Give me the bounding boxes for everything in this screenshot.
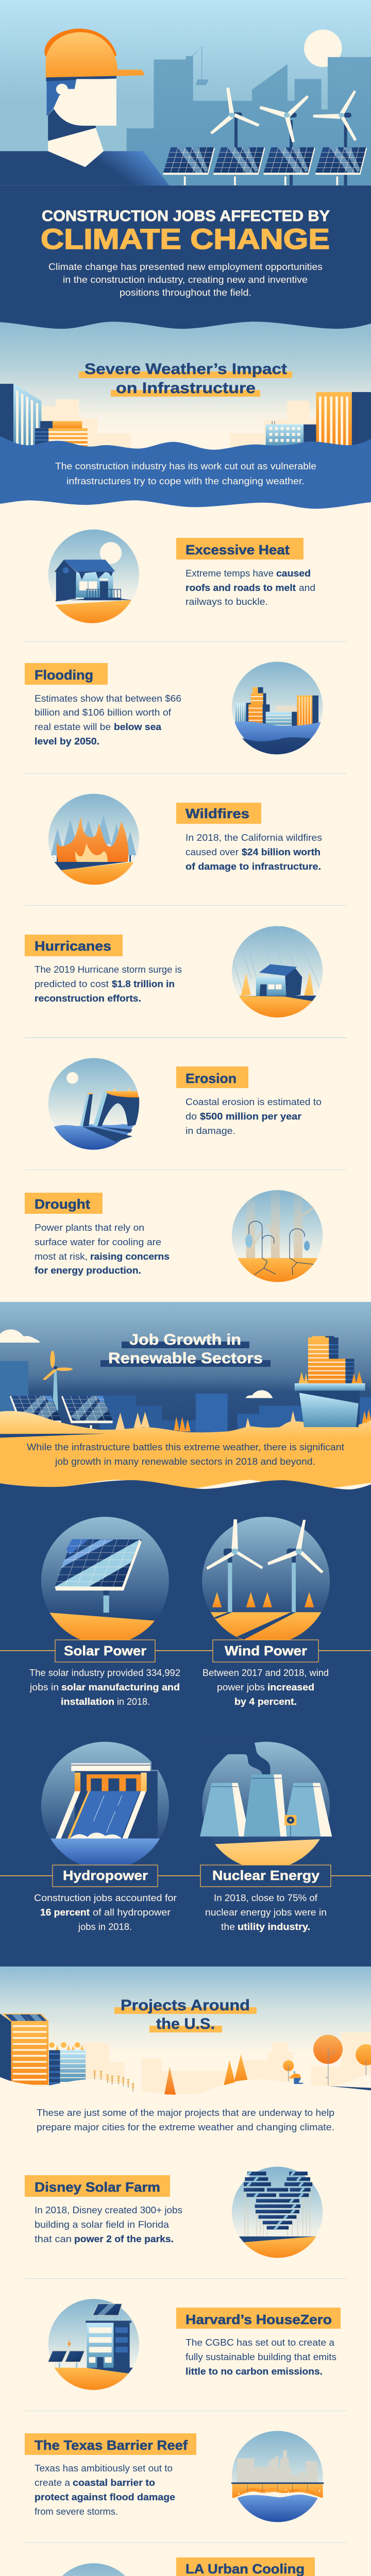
text: disney [35,2205,182,2244]
tag: drought [25,1193,103,1214]
text: erosion: in damage. [185,1126,235,1136]
wind turbines [211,88,357,185]
panel: severe weather banner [0,319,371,509]
intro text: positions throughout the field. [120,287,251,298]
text: nuclear energy: utility industry. [238,1922,310,1932]
text: flooding [35,693,181,747]
text: disney: power 2 of the parks. [74,2234,174,2244]
text: erosion: $500 million per year [200,1111,301,1122]
text: nuclear energy: In 2018, close to 75% of [214,1893,318,1903]
text: harvard [185,2337,336,2377]
text: wildfires [185,833,322,872]
text: texas: from severe storms. [35,2506,118,2517]
text: wind power [203,1668,329,1707]
text: flooding: real estate will be [35,722,111,732]
text: hydropower: jobs in 2018. [78,1922,132,1932]
text: nuclear energy [205,1893,327,1932]
tag: texas barrier reef: The Texas Barrier Reef [35,2437,188,2453]
icon: wind turbines [202,1517,330,1645]
icon: hurricane house [232,926,323,1018]
tag: hydropower [53,1865,158,1887]
text: drought: for energy production. [35,1265,141,1276]
heading: projects: Projects Around [121,1997,250,2014]
icon: LA urban cooling planters [48,2563,139,2576]
icon: planting worker [288,2071,304,2084]
connector line [0,1875,53,1876]
connector line [155,1650,371,1651]
text: projects intro: These are just some of the major projects that are underway to help [37,2108,334,2118]
panel: job growth banner [0,1302,371,1489]
panel: hero illustration [0,0,371,185]
foreground hill [0,2073,371,2106]
text: solar power: installation [61,1697,114,1707]
tag: excessive heat [176,538,303,560]
yellow ground [0,1411,371,1489]
panel: projects banner [0,1967,371,2106]
text: job growth intro: job growth in many renewable sectors in 2018 and beyond. [55,1456,315,1467]
ground trees [115,1409,371,1431]
text: solar power: The solar industry provided 334,992 [29,1668,180,1678]
pale skyline [84,2032,371,2095]
navy section background [0,1480,371,1967]
icon: flooded city [232,662,323,754]
text: texas: coastal barrier to [73,2478,155,2488]
tag: hydropower: Hydropower [63,1868,148,1883]
icon: hydro dam [41,1742,169,1870]
text: infrastructure intro: The construction industry has its work cut out as vulnerable [55,461,316,471]
text: texas: Texas has ambitiously set out to [35,2463,173,2473]
icon: yellow wind turbine [43,1351,73,1411]
tag: wind power [213,1640,318,1662]
text: wildfires: $24 billion worth [242,847,321,857]
text: drought: Power plants that rely on [35,1223,144,1233]
icon: disney solar field [232,2167,323,2258]
text: job growth intro: While the infrastructure battles this extreme weather, there is significant [27,1442,344,1452]
tag: hurricanes: Hurricanes [35,938,111,954]
icon: excessive heat house [48,530,139,623]
text: excessive heat [185,568,315,607]
text: hurricanes: $1.8 trillion in [112,979,175,989]
intro text: in the construction industry, creating new and inventive [63,275,308,285]
title [41,208,330,255]
text: projects intro [37,2108,334,2132]
text: erosion [185,1097,322,1136]
text: hurricanes: The 2019 Hurricane storm surge is [35,964,182,975]
tag: erosion [176,1066,248,1088]
text: texas: create a [35,2478,71,2488]
tag: harvard's housezero: Harvard’s HouseZero [185,2312,332,2327]
text: wind power: by 4 percent. [234,1697,297,1707]
text: disney: that can [35,2234,72,2244]
text: hydropower: of all hydropower [93,1907,171,1918]
text: infrastructure intro: infrastructures try to cope with the changing weather. [66,476,305,486]
text: hurricanes: predicted to cost [35,979,109,989]
text: drought: raising concerns [90,1251,170,1262]
tag: wildfires [176,803,261,824]
tower on hull [295,1336,365,1427]
text: nuclear energy: the [221,1922,235,1932]
icon: coastal erosion [48,1058,139,1150]
intro text: Climate change has presented new employment opportunities [48,262,323,272]
tag: texas barrier reef [25,2433,196,2455]
heading: job growth: Job Growth in [129,1331,241,1348]
text: erosion: do [185,1111,197,1122]
connector line [0,1650,55,1651]
solar panels [10,1396,113,1434]
heading: job growth: Renewable Sectors [108,1350,263,1367]
tag: solar power: Solar Power [64,1643,146,1658]
left buildings [0,384,131,451]
text: solar power: solar manufacturing and [61,1682,180,1692]
text: wildfires: of damage to infrastructure. [185,861,321,872]
background buildings [0,1361,371,1435]
striped buildings [0,2013,86,2086]
icon: nuclear towers [200,1740,332,1870]
text: flooding: level by 2050. [35,736,99,747]
text: disney: building a solar field in Florida [35,2219,170,2230]
text: harvard: little to no carbon emissions. [185,2366,323,2377]
roof trees [49,2042,84,2050]
text: nuclear energy: nuclear energy jobs were in [205,1907,327,1918]
text: wind power: power jobs [217,1682,265,1692]
right buildings [230,392,371,451]
text: harvard: fully sustainable building that emits [185,2352,336,2362]
city skyline and crane [127,46,371,185]
tag: nuclear energy [200,1865,331,1887]
icon: drought plants [232,1190,323,1282]
wheat plants [93,2070,134,2092]
text: flooding: below sea [114,722,162,732]
navy hero band [0,185,371,325]
text: excessive heat: Extreme temps have [185,568,274,579]
text: infrastructure intro [55,461,316,486]
text: excessive heat: roofs and roads to melt [185,583,296,593]
connector line [158,1875,371,1876]
text: projects intro: prepare major cities for the extreme weather and changing climate. [37,2122,334,2132]
text: solar power: jobs in [29,1682,59,1692]
foreground trees [164,2035,371,2095]
text: hydropower: 16 percent [40,1907,90,1918]
text: drought [35,1223,170,1276]
icon: sun [304,29,342,67]
tag: excessive heat: Excessive Heat [185,542,290,557]
text: flooding: billion and $106 billion worth of [35,707,172,718]
panel: wind power [155,1517,371,1707]
title: CLIMATE CHANGE [41,223,330,255]
clouds [0,1329,273,1398]
text: job growth intro [27,1442,344,1467]
text: flooding: Estimates show that between $66 [35,693,181,704]
text: solar power: in 2018. [117,1697,150,1707]
text: solar power [29,1668,180,1707]
text: texas [35,2463,175,2517]
title: CONSTRUCTION JOBS AFFECTED BY [42,208,330,225]
tag: disney solar farm [25,2175,170,2197]
text: excessive heat: and [299,583,315,593]
icon: texas barrier [231,2431,324,2522]
icon: wildfire [48,794,139,885]
text: drought: most at risk, [35,1251,88,1262]
panel: solar power [0,1517,180,1707]
tag: flooding [25,663,108,685]
tag: LA urban cooling [176,2557,315,2576]
heading: severe weather: Severe Weather’s Impact [85,361,287,378]
icon: harvard housezero [48,2299,139,2390]
panel: nuclear energy [158,1740,371,1932]
tag: flooding: Flooding [35,667,93,683]
tag: drought: Drought [35,1196,90,1212]
tag: wildfires: Wildfires [185,806,249,821]
panel: hydropower [0,1742,177,1932]
intro text [48,262,323,298]
text: hurricanes [35,964,182,1004]
tag: disney solar farm: Disney Solar Farm [35,2179,160,2195]
heading: projects: the U.S. [156,2015,215,2032]
text: excessive heat: railways to buckle. [185,597,268,607]
heading: projects [114,1997,257,2032]
tag: solar power [55,1640,155,1662]
tag: hurricanes [25,935,123,956]
icon: solar panel [41,1517,169,1645]
worker in hard hat [0,28,169,185]
text: hurricanes: reconstruction efforts. [35,993,141,1004]
text: wildfires: caused over [185,847,239,857]
text: wildfires: In 2018, the California wildfires [185,833,322,843]
text: hydropower: Construction jobs accounted for [34,1893,177,1903]
heading: severe weather: on Infrastructure [116,380,256,397]
blue flood wave [0,436,371,509]
heading: job growth [100,1331,271,1367]
tag: nuclear energy: Nuclear Energy [212,1868,320,1883]
text: hydropower [34,1893,177,1932]
text: drought: surface water for cooling are [35,1237,161,1247]
tag: harvard's housezero [176,2308,341,2329]
tag: erosion: Erosion [185,1071,237,1086]
text: erosion: Coastal erosion is estimated to [185,1097,322,1107]
text: excessive heat: caused [276,568,311,579]
heading: severe weather [79,361,292,397]
tag: wind power: Wind Power [225,1643,307,1658]
solar panels [163,147,367,185]
text: wind power: increased [267,1682,314,1692]
text: wind power: Between 2017 and 2018, wind [203,1668,329,1678]
text: harvard: The CGBC has set out to create a [185,2337,335,2348]
text: disney: In 2018, Disney created 300+ jobs [35,2205,182,2215]
text: texas: protect against flood damage [35,2492,175,2502]
